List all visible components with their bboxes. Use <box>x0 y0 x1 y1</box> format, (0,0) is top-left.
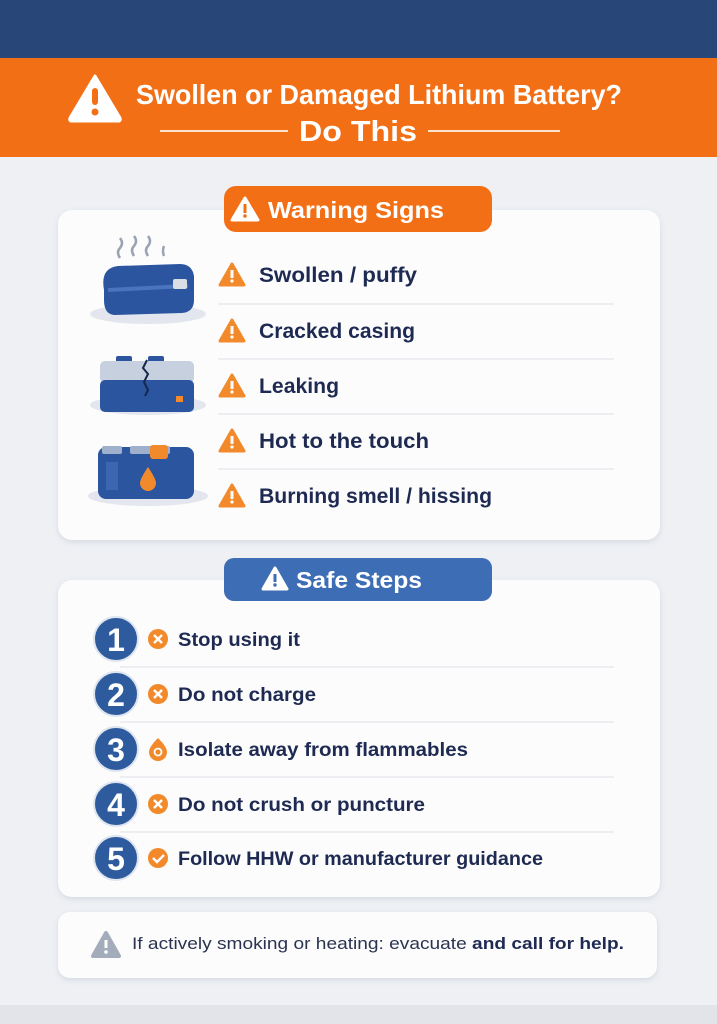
icon: cracked battery <box>90 356 206 415</box>
icon: grey warning <box>93 933 119 956</box>
pill: warning signs heading <box>224 186 492 232</box>
top navy band <box>0 0 717 58</box>
item: leaking: Leaking <box>259 375 339 398</box>
icon: leaking battery <box>88 445 208 506</box>
step 5: Follow HHW or manufacturer guidance <box>178 849 543 870</box>
item: burning: Burning smell / hissing <box>259 485 492 508</box>
item: swollen: Swollen / puffy <box>259 264 417 287</box>
callout: emergency <box>58 912 657 978</box>
list: safe steps <box>94 617 543 880</box>
pill: warning signs heading: Warning Signs <box>268 197 444 223</box>
step 3: Isolate away from flammables <box>178 740 468 761</box>
step 2 <box>94 672 316 716</box>
subtitle: Do This <box>299 116 417 148</box>
step 5 <box>94 836 543 880</box>
item: cracked: Cracked casing <box>259 320 415 343</box>
pill: safe steps heading: Safe Steps <box>296 567 422 593</box>
icon: swollen battery <box>90 236 206 324</box>
step 4 <box>94 782 425 826</box>
step 2: Do not charge <box>178 685 316 706</box>
title: Swollen or Damaged Lithium Battery? <box>136 79 622 110</box>
list: warning signs <box>218 264 614 508</box>
step 3: 3 <box>107 732 125 768</box>
step 3 <box>94 727 468 771</box>
step 2: 2 <box>107 677 125 713</box>
step 1: 1 <box>107 622 125 658</box>
panel: safe steps <box>58 558 660 897</box>
step 4: Do not crush or puncture <box>178 795 425 816</box>
step 5: 5 <box>107 841 125 877</box>
step 4: 4 <box>107 787 125 823</box>
item: leaking <box>220 375 339 398</box>
pill: safe steps heading <box>224 558 492 601</box>
step 1 <box>94 617 301 661</box>
step 1: Stop using it <box>178 630 301 651</box>
header banner <box>0 58 717 157</box>
icon: header warning <box>70 76 120 121</box>
item: hot: Hot to the touch <box>259 430 429 453</box>
callout: emergency: If actively smoking or heating: evacuate and call for help. <box>132 934 624 953</box>
panel: warning signs <box>58 186 660 540</box>
